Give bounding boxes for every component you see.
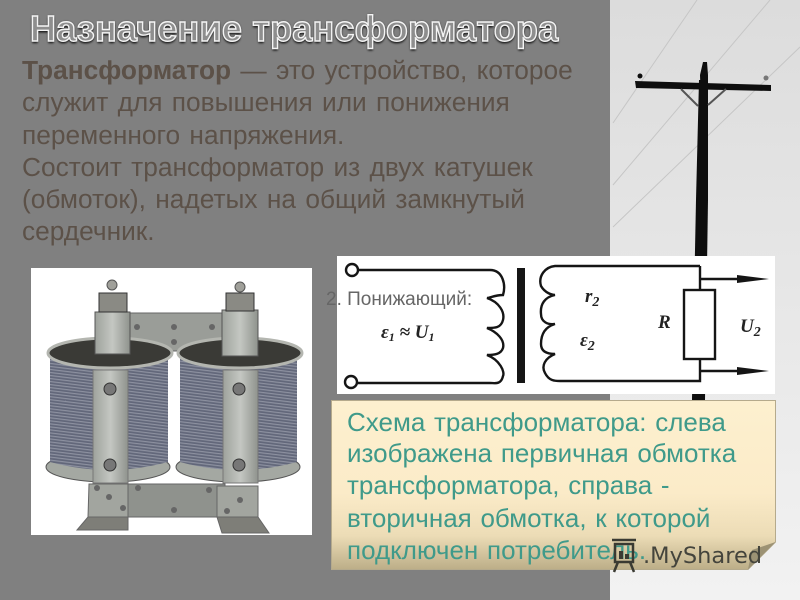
- callout: diagram explanation note: подключен потребитель.: [347, 535, 646, 565]
- photo: utility pole on pale sky: [610, 0, 800, 600]
- circuit labels: r: [585, 286, 592, 307]
- callout: diagram explanation note: изображена первичная обмотка: [347, 438, 736, 468]
- text block: definition of a transformer: (обмоток), надетых на общий замкнутый: [22, 184, 525, 214]
- text block: definition of a transformer: Трансформатор — это устройство, которое: [22, 55, 573, 85]
- callout: diagram explanation note: трансформатора, справа -: [347, 470, 670, 500]
- right coil: [176, 282, 302, 483]
- circuit labels: [381, 286, 761, 354]
- callout: diagram explanation note: Схема трансформатора: слева: [347, 407, 726, 437]
- text block: definition of a transformer: переменного напряжения.: [22, 120, 344, 150]
- text block: definition of a transformer: сердечник.: [22, 216, 155, 246]
- watermark: MyShared: [612, 538, 762, 572]
- circuit labels: ≈ U: [395, 322, 430, 343]
- circuit labels: U: [740, 316, 754, 337]
- circuit diagram: [337, 256, 775, 394]
- primary winding: [345, 264, 504, 388]
- circuit labels: ε: [580, 330, 588, 351]
- upper yoke: [128, 313, 224, 351]
- text block: definition of a transformer: служит для повышения или понижения: [22, 87, 510, 117]
- callout: diagram explanation note: [331, 400, 776, 570]
- lower yoke and feet: [77, 484, 269, 533]
- circuit labels: 2: [591, 295, 599, 310]
- output arrows: [737, 275, 769, 375]
- diagram label: 2. Понижающий:: [326, 289, 472, 310]
- callout: diagram explanation note: вторичная обмотка, к которой: [347, 503, 710, 533]
- left coil: [46, 280, 172, 483]
- text block: definition of a transformer: [22, 55, 573, 246]
- circuit labels: ε: [381, 322, 389, 343]
- circuit labels: 2: [753, 325, 761, 340]
- text block: definition of a transformer: Состоит трансформатор из двух катушек: [22, 152, 533, 182]
- circuit labels: 1: [389, 330, 395, 344]
- secondary winding and load: [540, 266, 745, 381]
- circuit labels: R: [657, 312, 671, 333]
- title: Назначение трансформатора: [30, 8, 558, 49]
- core: [517, 268, 525, 383]
- watermark: MyShared: .MyShared: [643, 543, 762, 569]
- circuit labels: 2: [587, 339, 595, 354]
- circuit labels: 1: [428, 330, 434, 344]
- photo: transformer with two coils: [31, 268, 312, 535]
